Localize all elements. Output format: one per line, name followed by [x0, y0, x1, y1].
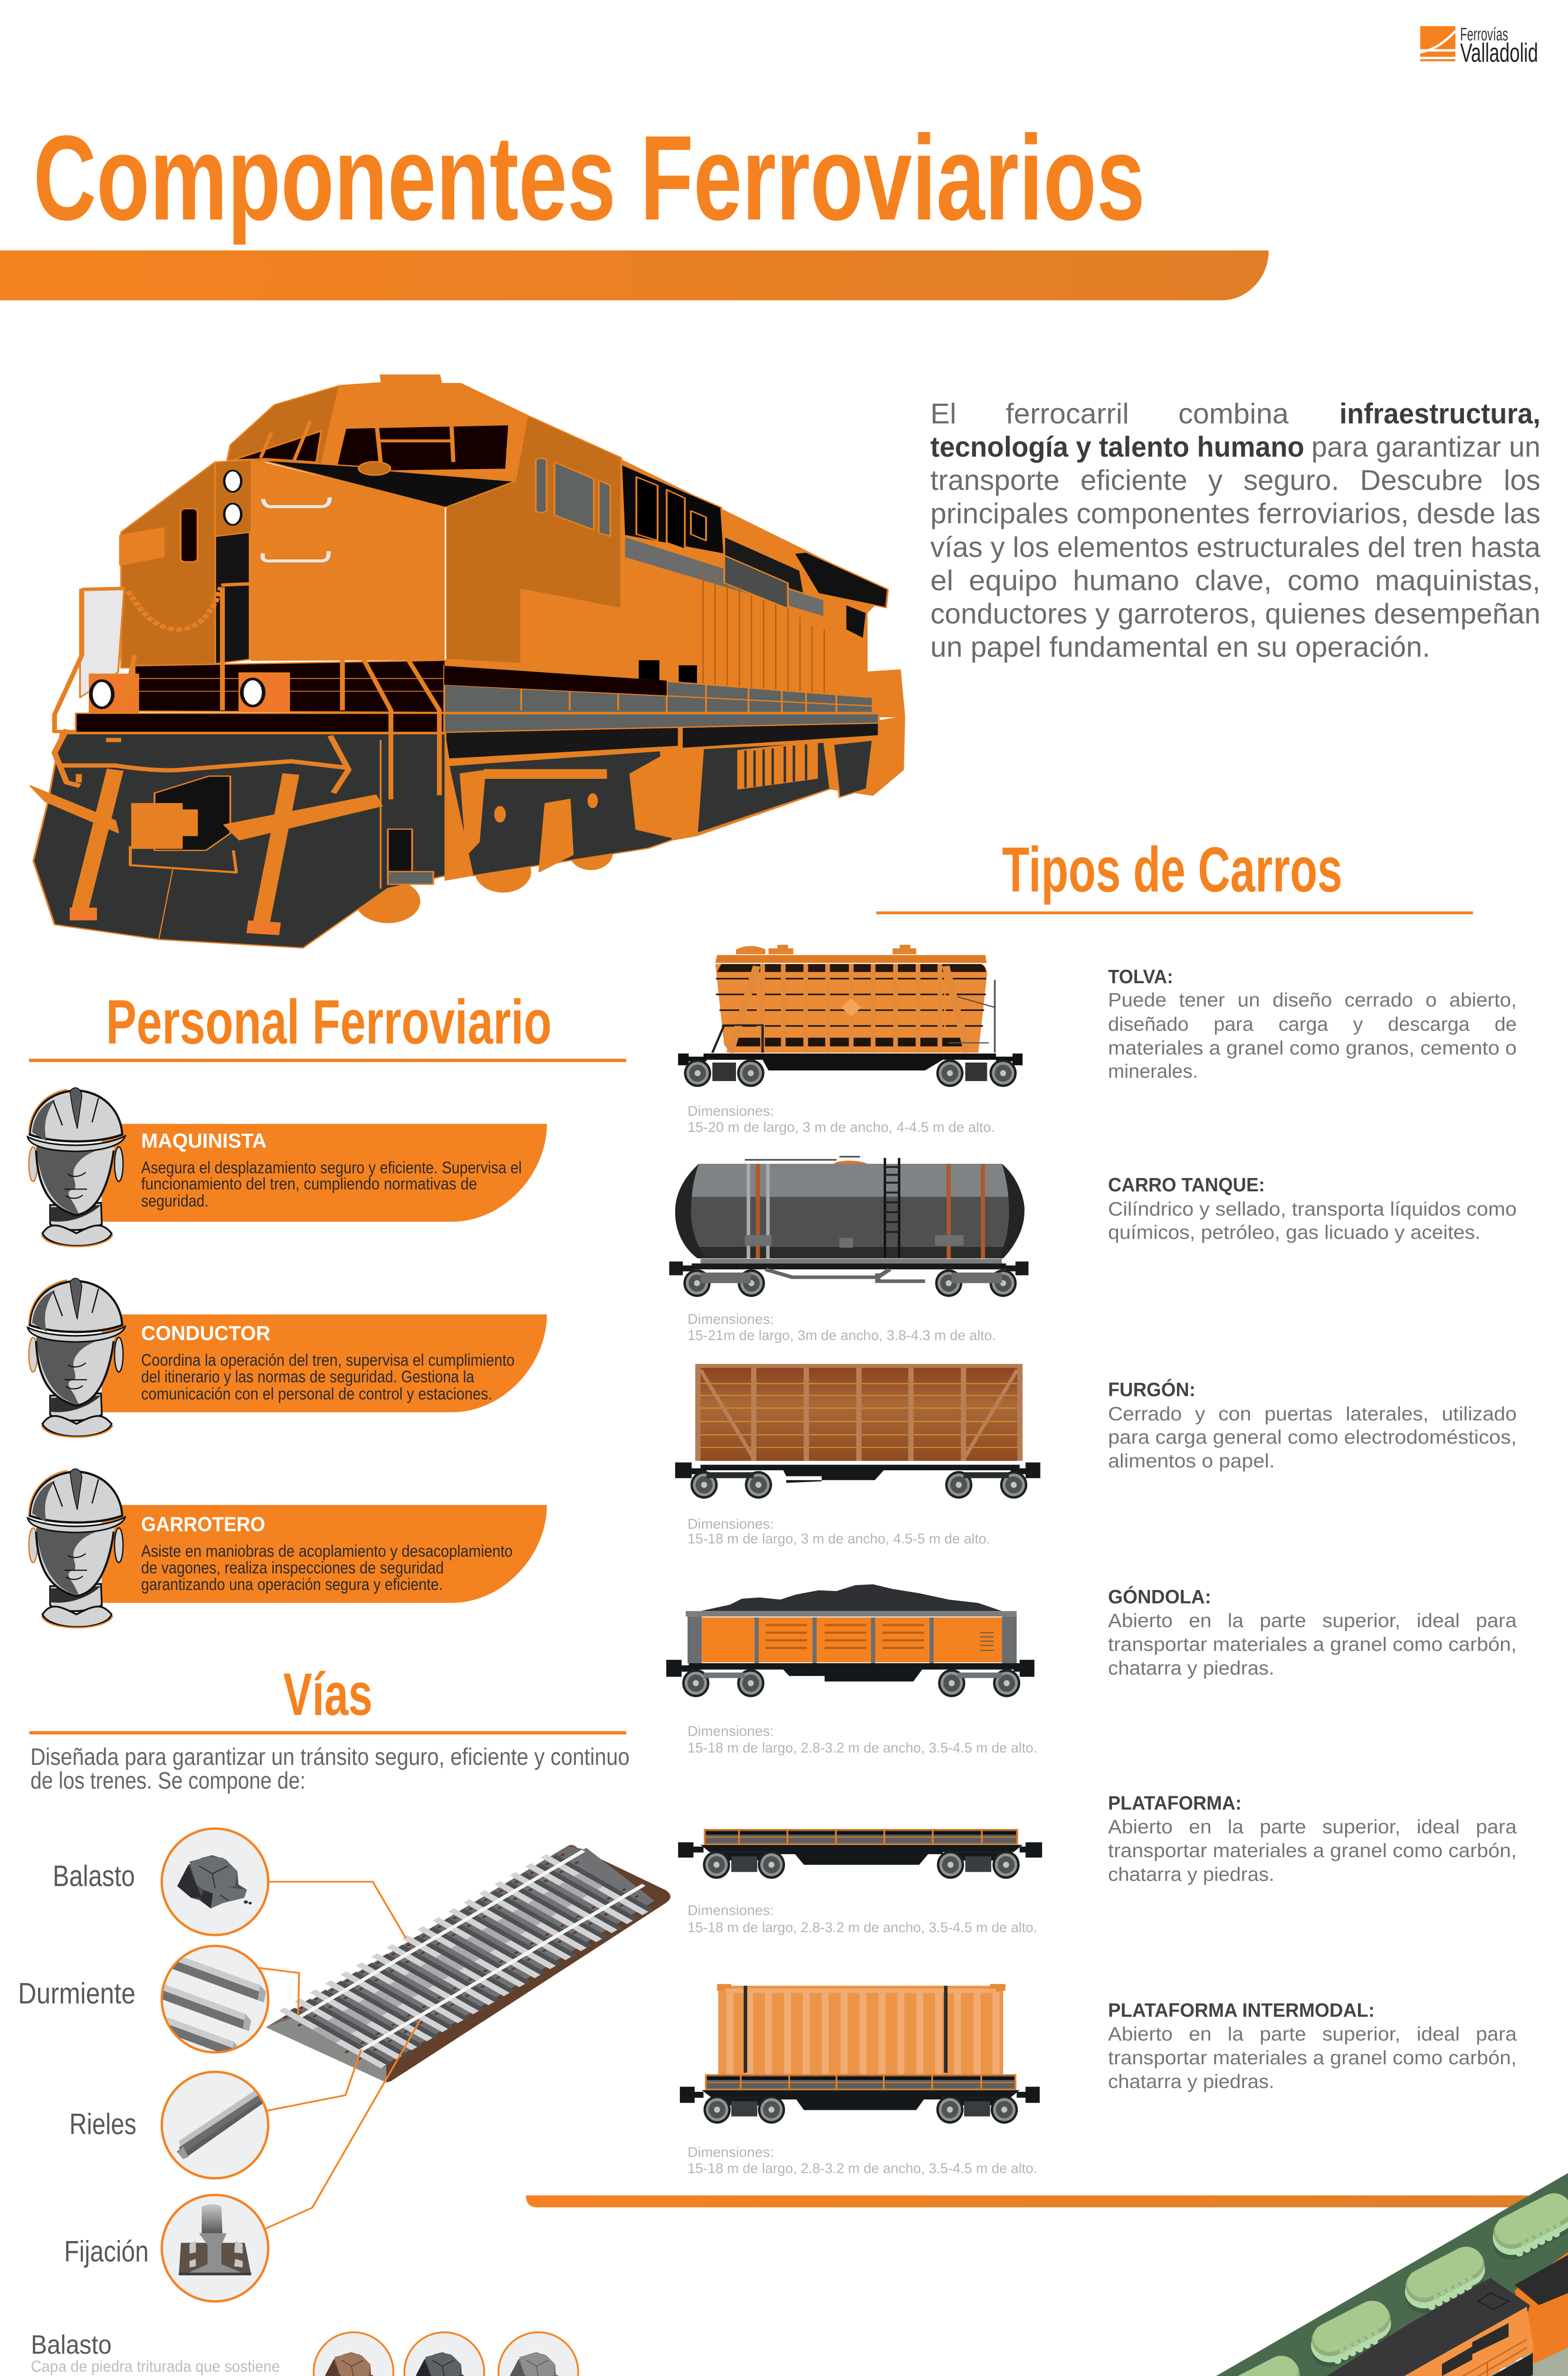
illustration: level crossing terrain: [622, 2173, 1568, 2376]
text: plataforma: Abierto en la parte superior, ideal para: [1108, 1816, 1517, 1838]
deck: [444, 714, 879, 732]
wheels: [356, 880, 420, 922]
vías description: de los trenes. Se compone de:: [30, 1767, 306, 1794]
intro text: para garantizar un: [1311, 431, 1540, 463]
text: góndola: Abierto en la parte superior, ideal para: [1108, 1610, 1517, 1631]
text: plataforma intermodal: [1108, 1999, 1517, 2092]
text: plataforma: transportar materiales a granel como carbón,: [1108, 1839, 1517, 1861]
icon: worker head: [28, 1088, 125, 1246]
intro text: conductores y garroteros, quienes desempeñan: [930, 598, 1540, 630]
side grey panel: [80, 587, 124, 698]
cab doors: [528, 599, 615, 704]
intro text: vías y los elementos estructurales del tren hasta: [930, 531, 1541, 563]
side windows: [536, 458, 610, 537]
upper black panels: [621, 464, 724, 554]
text: tolva: materiales a granel como granos, cemento o: [1108, 1037, 1517, 1059]
label: Durmiente: Durmiente: [18, 1977, 135, 2010]
label: Fijación: Fijación: [64, 2235, 149, 2268]
heading: Personal Ferroviario: Personal Ferroviario: [106, 987, 552, 1057]
text: tolva: [1108, 966, 1517, 1082]
dimensions: furgón: [688, 1516, 990, 1547]
title bar: [0, 250, 1269, 300]
icon: worker head: [28, 1469, 125, 1628]
text: góndola: chatarra y piedras.: [1108, 1657, 1274, 1679]
ballast: [266, 1845, 670, 2082]
intro text: tecnología y talento humano: [930, 431, 1304, 463]
text: furgón: para carga general como electrodomésticos,: [1108, 1426, 1517, 1448]
label: Balasto: Balasto: [53, 1860, 135, 1893]
nose left side: [121, 462, 215, 668]
text: plataforma intermodal: PLATAFORMA INTERMODAL:: [1108, 1999, 1375, 2021]
rear body: [445, 460, 904, 717]
panel: garrotero: GARROTERO: [141, 1513, 265, 1536]
detail: Balasto: Capa de piedra triturada que sostiene: [31, 2357, 280, 2375]
divider bar: [526, 2195, 1535, 2207]
windshield: [336, 425, 509, 471]
text: góndola: GÓNDOLA:: [1108, 1586, 1211, 1608]
text: carro tanque: Cilíndrico y sellado, transporta líquidos como: [1108, 1198, 1517, 1220]
dimensions: carro tanque: 15-21m de largo, 3m de ancho, 3.8-4.3 m de alto.: [688, 1328, 996, 1343]
intro text: El ferrocarril combina: [930, 398, 1289, 430]
diagram: track section: [259, 1845, 670, 2229]
text: furgón: Cerrado y con puertas laterales, utilizado: [1108, 1403, 1517, 1425]
intro text: principales componentes ferroviarios, desde las: [930, 498, 1540, 529]
handrails: [1248, 2339, 1527, 2376]
dimensions: plataforma: 15-18 m de largo, 2.8-3.2 m de ancho, 3.5-4.5 m de alto.: [688, 1920, 1037, 1935]
panel: maquinista: seguridad.: [141, 1192, 209, 1210]
icon: worker head: [28, 1278, 125, 1437]
text: tolva: minerales.: [1108, 1060, 1198, 1082]
grey side band: [444, 666, 873, 712]
vías description: [30, 1744, 630, 1794]
rails: [755, 2316, 1568, 2376]
wagon: plataforma: [678, 1830, 1042, 1879]
nose front: [251, 460, 445, 660]
heading: Tipos de Carros: [876, 834, 1473, 914]
detail: Balasto: Balasto: [31, 2329, 112, 2359]
wagon: tolva: [678, 945, 1023, 1087]
label: Rieles: Rieles: [69, 2108, 136, 2141]
wagon: furgón: [675, 1364, 1040, 1499]
icon: rail circle: [162, 2072, 268, 2178]
dark front band: [134, 660, 445, 712]
pilot top: [76, 713, 445, 732]
panel: maquinista: MAQUINISTA: [141, 1130, 267, 1152]
intro text: [930, 398, 1541, 663]
intro text: infraestructura,: [1339, 398, 1540, 430]
illustration: locomotive: [30, 375, 904, 948]
panel: garrotero: garantizando una operación segura y eficiente.: [141, 1575, 443, 1594]
dimensions: carro tanque: Dimensiones:: [688, 1312, 774, 1327]
panel: conductor: comunicación con el personal de control y estaciones.: [141, 1385, 492, 1403]
leader lines: [259, 1882, 421, 2229]
bushes: [715, 2201, 1564, 2376]
text: plataforma intermodal: chatarra y piedras.: [1108, 2070, 1274, 2092]
heading: Tipos de Carros: Tipos de Carros: [1002, 834, 1342, 905]
dimensions: tolva: 15-20 m de largo, 3 m de ancho, 4-4.5 m de alto.: [688, 1120, 995, 1135]
wagon: plataforma intermodal: [680, 1984, 1040, 2124]
text: furgón: alimentos o papel.: [1108, 1450, 1275, 1472]
intro text: el equipo humano clave, como maquinistas,: [930, 565, 1540, 596]
dimensions: furgón: Dimensiones:: [688, 1516, 774, 1532]
icon: sleepers circle: [161, 1945, 269, 2054]
logo: Ferrovías: [1460, 25, 1508, 45]
cab front: [321, 375, 527, 481]
text: furgón: [1108, 1379, 1517, 1472]
text: carro tanque: químicos, petróleo, gas licuado y aceites.: [1108, 1221, 1481, 1243]
banner: [102, 1505, 547, 1603]
intro text: un papel fundamental en su operación.: [930, 631, 1430, 663]
icon: ballast circle: [162, 1829, 268, 1935]
light housing: [215, 532, 250, 664]
icon: tipo 24: [314, 2332, 393, 2376]
title: Componentes Ferroviarios: [33, 110, 1145, 245]
lights: [90, 673, 289, 712]
panel: conductor: del itinerario y las normas de seguridad. Gestiona la: [141, 1368, 474, 1386]
sleepers: [763, 2320, 1568, 2376]
text: góndola: [1108, 1586, 1517, 1679]
plow fins: [30, 786, 118, 833]
text: plataforma intermodal: Abierto en la parte superior, ideal para: [1108, 2023, 1517, 2045]
panel: garrotero: [28, 1469, 547, 1628]
wagon: carro tanque: [669, 1157, 1029, 1297]
dimensions: plataforma intermodal: Dimensiones:: [688, 2145, 774, 2160]
dimensions: plataforma intermodal: 15-18 m de largo, 2.8-3.2 m de ancho, 3.5-4.5 m de alto.: [688, 2161, 1037, 2176]
nose side: [445, 415, 621, 664]
text: plataforma: PLATAFORMA:: [1108, 1792, 1242, 1814]
panel: maquinista: Asegura el desplazamiento seguro y eficiente. Supervisa el: [141, 1159, 522, 1177]
coupler box: [154, 776, 230, 850]
panel: conductor: [28, 1278, 547, 1437]
track bed: [735, 2304, 1568, 2376]
dimensions: góndola: 15-18 m de largo, 2.8-3.2 m de ancho, 3.5-4.5 m de alto.: [688, 1740, 1037, 1756]
text: tolva: diseñado para carga y descarga de: [1108, 1013, 1517, 1035]
text: plataforma: chatarra y piedras.: [1108, 1863, 1274, 1885]
panel: maquinista: funcionamiento del tren, cumpliendo normativas de: [141, 1175, 477, 1193]
logo: [1420, 25, 1538, 67]
text: tolva: TOLVA:: [1108, 966, 1173, 987]
icon: tipo 5: [498, 2332, 578, 2376]
handrail: [55, 729, 348, 793]
dimensions: furgón: 15-18 m de largo, 3 m de ancho, 4.5-5 m de alto.: [688, 1531, 990, 1547]
text: plataforma intermodal: transportar materiales a granel como carbón,: [1108, 2047, 1517, 2069]
pilot plow: [33, 734, 445, 948]
text: góndola: transportar materiales a granel como carbón,: [1108, 1633, 1517, 1655]
heading: Vías: Vías: [283, 1661, 373, 1728]
intro text: transporte eficiente y seguro. Descubre los: [930, 464, 1540, 496]
locomotive model: [1180, 2252, 1568, 2376]
text: furgón: FURGÓN:: [1108, 1379, 1195, 1400]
panel: conductor: CONDUCTOR: [141, 1322, 270, 1345]
text: carro tanque: CARRO TANQUE:: [1108, 1174, 1265, 1196]
text: carro tanque: [1108, 1174, 1517, 1243]
wagon: góndola: [666, 1584, 1034, 1697]
cab roof side: [227, 386, 339, 464]
ground: [622, 2173, 1568, 2376]
detail: Balasto: [31, 2329, 294, 2376]
pipes: [79, 770, 115, 914]
icon: fastening circle: [162, 2195, 268, 2301]
dimensions: tolva: [688, 1103, 995, 1135]
banner: [102, 1314, 547, 1412]
heading: Vías: [29, 1661, 626, 1734]
banner: [102, 1124, 547, 1222]
panel: garrotero: de vagones, realiza inspecciones de seguridad: [141, 1559, 444, 1577]
dimensions: plataforma intermodal: [688, 2145, 1037, 2176]
text: tolva: Puede tener un diseño cerrado o abierto,: [1108, 989, 1517, 1011]
panel: conductor: Coordina la operación del tren, supervisa el cumplimiento: [141, 1351, 515, 1370]
underbody backing: [444, 717, 904, 880]
dimensions: góndola: Dimensiones:: [688, 1724, 774, 1739]
dimensions: carro tanque: [688, 1312, 996, 1343]
truck: [449, 751, 673, 876]
dimensions: plataforma: [688, 1903, 1037, 1935]
panel: maquinista: [28, 1088, 547, 1246]
text: plataforma: [1108, 1792, 1517, 1885]
dimensions: tolva: Dimensiones:: [688, 1103, 774, 1119]
vías description: Diseñada para garantizar un tránsito seguro, eficiente y continuo: [30, 1744, 630, 1770]
dimensions: góndola: [688, 1724, 1037, 1756]
dimensions: plataforma: Dimensiones:: [688, 1903, 774, 1918]
panel: garrotero: Asiste en maniobras de acoplamiento y desacoplamiento: [141, 1542, 513, 1561]
sleepers and rails: [284, 1847, 650, 2060]
icon: tipo 25: [404, 2332, 484, 2376]
